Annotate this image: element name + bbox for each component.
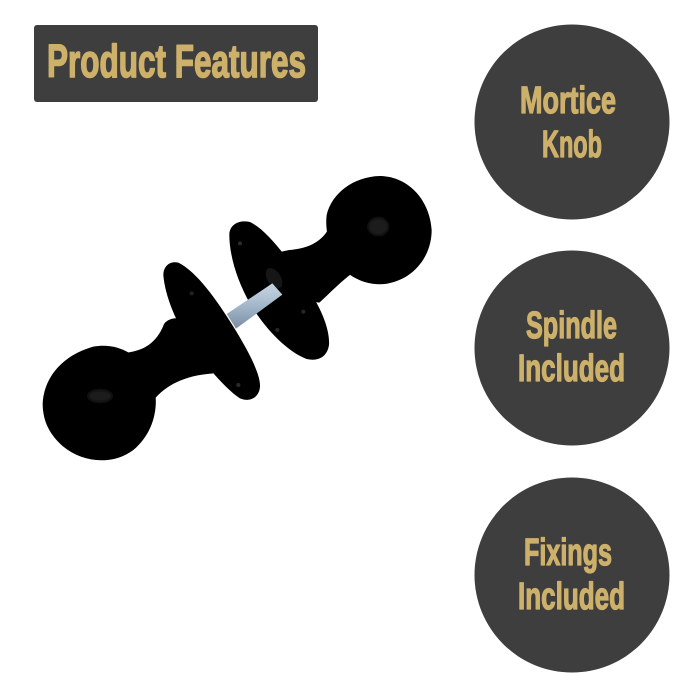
heading: Product Features: Product Features: [47, 35, 306, 87]
knob highlights: [88, 218, 388, 402]
badge: Fixings Included: Included: [518, 576, 625, 618]
left rose plate: [163, 262, 260, 400]
badge: Spindle Included: Included: [518, 348, 625, 390]
product photo: black mortice door knobs with spindle: [43, 176, 432, 460]
badge: Mortice Knob: Knob: [542, 124, 602, 166]
badge: Mortice Knob: Mortice: [520, 80, 616, 122]
right knob ball: [326, 176, 432, 284]
badge: Fixings Included: Fixings: [524, 532, 612, 574]
badge: Mortice Knob: [474, 24, 670, 220]
badge: Spindle Included: Spindle: [526, 305, 617, 347]
right knob neck: [273, 229, 357, 303]
badge: Spindle Included: [474, 250, 670, 446]
left knob neck: [127, 318, 213, 398]
left knob ball: [43, 346, 156, 460]
right rose plate: [229, 221, 329, 360]
badge: Fixings Included: [474, 478, 670, 672]
spindle: [227, 283, 282, 329]
heading: Product Features: [34, 25, 318, 102]
